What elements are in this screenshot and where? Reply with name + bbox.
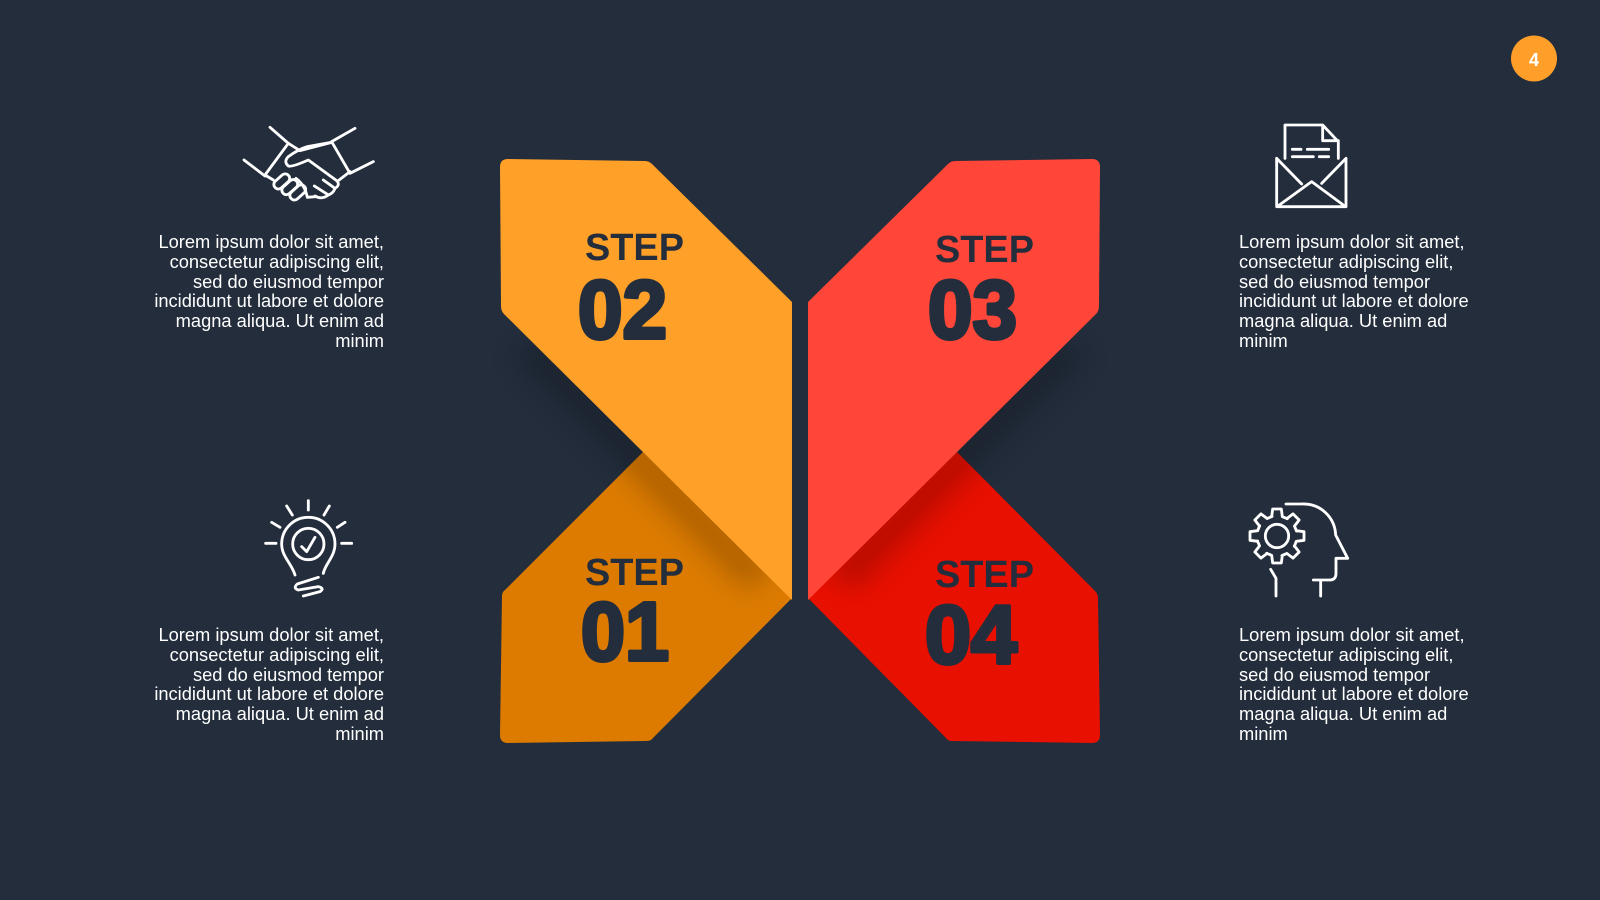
text block: step 02 description: incididunt ut labore et dolore	[154, 290, 384, 311]
text block: step 03 description	[1239, 231, 1469, 351]
text block: step 02 description: consectetur adipiscing elit,	[170, 251, 384, 272]
shape: step 01 fold	[500, 452, 792, 743]
text block: step 01 description: incididunt ut labore et dolore	[154, 683, 384, 704]
text block: step 03 description: magna aliqua. Ut enim ad	[1239, 310, 1447, 331]
text block: step 04 description	[1239, 624, 1469, 744]
text block: step 03 description: sed do eiusmod tempor	[1239, 271, 1430, 292]
text block: step 03 description: consectetur adipiscing elit,	[1239, 251, 1453, 272]
text block: step 04 description: sed do eiusmod tempor	[1239, 664, 1430, 685]
number: 03: 03	[928, 263, 1017, 356]
shadow: step 02 cast on step 01	[532, 354, 772, 594]
shape: step 02 fold	[500, 159, 792, 600]
icon: head with gear	[1250, 504, 1348, 596]
icon: envelope with document	[1277, 125, 1346, 207]
text block: step 04 description: magna aliqua. Ut enim ad	[1239, 703, 1447, 724]
text block: step 02 description	[154, 231, 384, 351]
shape: step 03 fold	[808, 159, 1100, 600]
label: step 04: STEP	[935, 554, 1034, 596]
text block: step 04 description: minim	[1239, 723, 1288, 744]
panel: step 01	[500, 340, 792, 743]
text block: step 02 description: sed do eiusmod tempor	[193, 271, 384, 292]
text block: step 02 description: Lorem ipsum dolor sit amet,	[158, 231, 384, 252]
text block: step 02 description: magna aliqua. Ut enim ad	[176, 310, 384, 331]
page number badge	[1511, 36, 1557, 82]
text block: step 04 description: Lorem ipsum dolor sit amet,	[1239, 624, 1465, 645]
label: step 01: STEP	[585, 552, 684, 594]
number: 04: 04	[925, 588, 1017, 681]
shape: step 04 fold	[808, 452, 1100, 743]
text block: step 01 description: sed do eiusmod tempor	[193, 664, 384, 685]
text block: step 04 description: incididunt ut labore et dolore	[1239, 683, 1469, 704]
panel: step 04	[808, 340, 1100, 743]
text block: step 02 description: minim	[335, 330, 384, 351]
text block: step 01 description: magna aliqua. Ut enim ad	[176, 703, 384, 724]
number: 01: 01	[581, 585, 669, 678]
label: step 03: STEP	[935, 229, 1034, 271]
icon: handshake	[244, 127, 373, 202]
page number badge: 4	[1529, 50, 1539, 70]
icon: light bulb with check	[266, 501, 352, 596]
text block: step 01 description: minim	[335, 723, 384, 744]
label: step 02: STEP	[585, 227, 684, 269]
panel: step 02	[500, 159, 792, 600]
text block: step 03 description: incididunt ut labore et dolore	[1239, 290, 1469, 311]
shadow: step 03 cast on step 04	[827, 354, 1068, 595]
text block: step 01 description: consectetur adipiscing elit,	[170, 644, 384, 665]
text block: step 01 description: Lorem ipsum dolor sit amet,	[158, 624, 384, 645]
text block: step 04 description: consectetur adipiscing elit,	[1239, 644, 1453, 665]
text block: step 01 description	[154, 624, 384, 744]
text block: step 03 description: minim	[1239, 330, 1288, 351]
number: 02: 02	[578, 263, 667, 356]
panel: step 03	[808, 159, 1100, 600]
text block: step 03 description: Lorem ipsum dolor sit amet,	[1239, 231, 1465, 252]
